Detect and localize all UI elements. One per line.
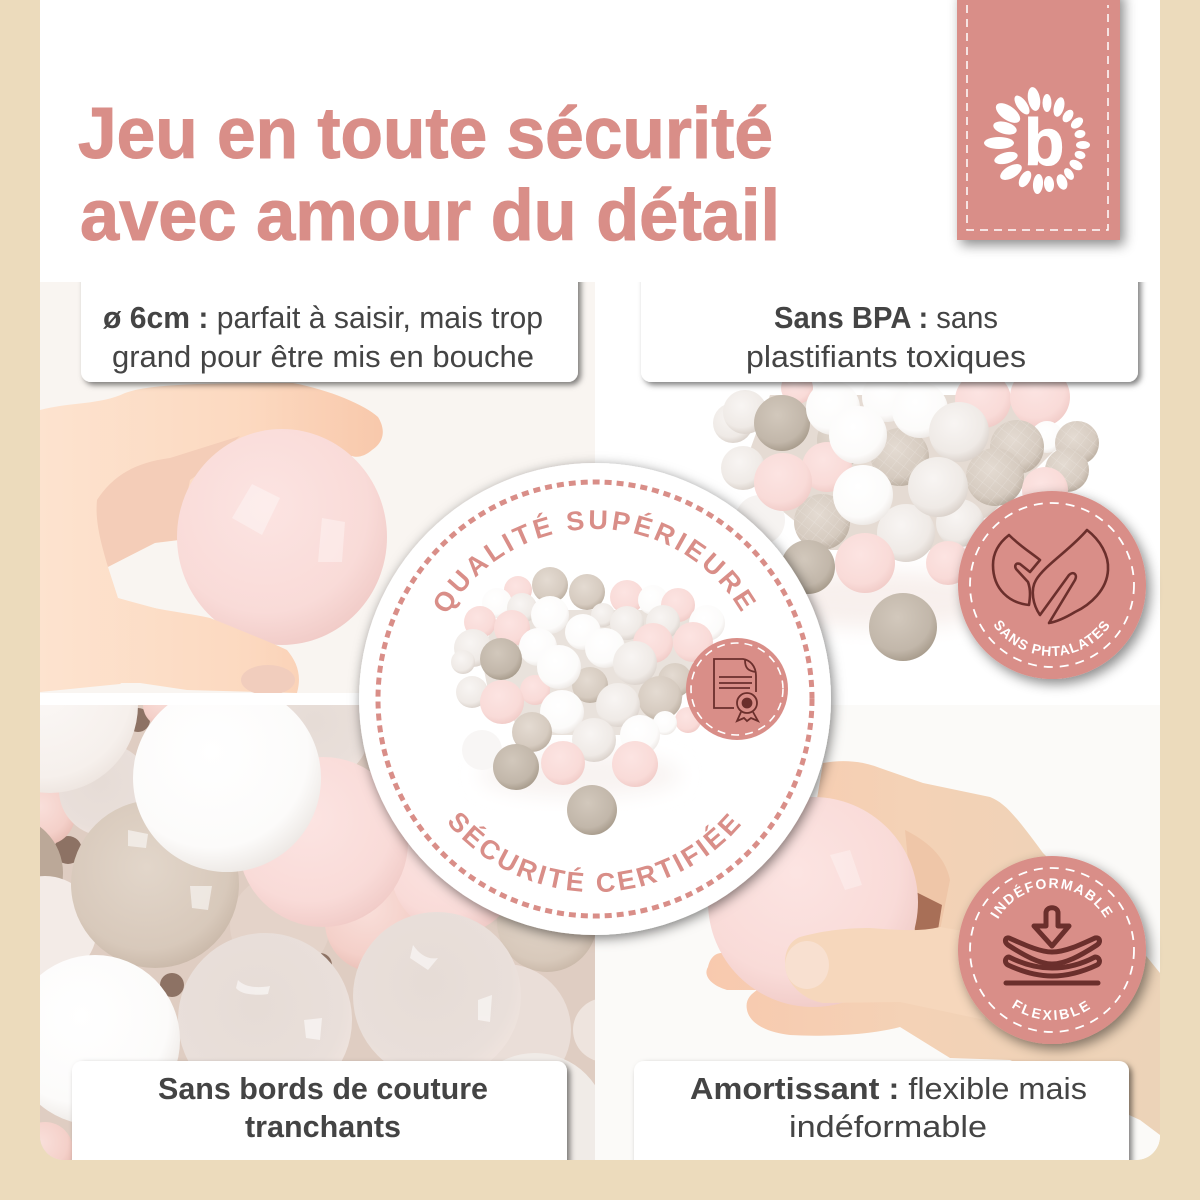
label: no sharp seams	[71, 1060, 574, 1160]
label: diameter	[81, 262, 578, 382]
panel: ball held between fingers photo	[40, 282, 595, 695]
panel: close-up of balls photo	[40, 705, 595, 1160]
curved text: sans phtalates: SANS PHTALATES	[994, 620, 1109, 656]
label: no sharp seams: Sans bords de couture	[158, 1071, 488, 1106]
icon: leaves	[993, 530, 1108, 623]
panel: hand squeezing ball photo	[706, 761, 1160, 1160]
curved text: flexible: FLEXIBLE	[1012, 999, 1090, 1020]
curved text: top: QUALITÉ SUPÉRIEURE	[434, 510, 756, 612]
pink ball squeezed	[708, 797, 918, 1007]
icon: flower logo: b	[1024, 105, 1064, 179]
brand ribbon with logo	[957, 0, 1120, 240]
ball outside the net	[869, 593, 937, 661]
icon: compressed layers with arrow	[1005, 908, 1099, 983]
title	[78, 94, 780, 256]
thumb	[122, 608, 299, 693]
label: diameter: grand pour être mis en bouche	[112, 339, 534, 374]
ball highlights	[128, 830, 492, 1040]
label: no sharp seams: tranchants	[245, 1109, 401, 1144]
labels group	[72, 262, 1138, 1186]
label: diameter: ø 6cm : parfait à saisir, mais trop	[103, 300, 543, 335]
soft shadow under pile	[480, 753, 680, 797]
central quality seal	[352, 457, 842, 947]
icon: flower logo	[984, 86, 1090, 194]
panel: net of balls photo	[713, 367, 1099, 661]
soft shadow under balls	[806, 572, 964, 628]
icon: document with seal	[714, 659, 758, 721]
gap between fingers	[108, 540, 215, 622]
title: avec amour du détail	[80, 176, 780, 256]
thumbnail	[785, 941, 829, 989]
inner palm and fingers	[97, 436, 240, 567]
palm shadow	[905, 830, 950, 930]
curved text: bottom: SÉCURITÉ CERTIFIÉE	[449, 812, 741, 892]
badge: phthalate free	[954, 488, 1158, 692]
label: BPA free: Sans BPA : sans	[774, 300, 998, 335]
dark gap behind ball	[914, 892, 942, 930]
hand silhouette	[40, 383, 383, 692]
pile of balls	[451, 567, 725, 835]
balls inside the net	[713, 367, 1099, 594]
thumbnail	[241, 665, 295, 695]
thumb over ball	[785, 927, 940, 1003]
hand silhouette	[706, 761, 1160, 1135]
badge: flexible	[954, 852, 1158, 1057]
label: BPA free: plastifiants toxiques	[746, 339, 1026, 374]
badge: certificate	[686, 638, 788, 740]
label: shock absorbing: Amortissant : flexible mais	[690, 1071, 1087, 1106]
pink ball in hand	[177, 429, 387, 645]
label: shock absorbing: indéformable	[789, 1109, 987, 1144]
title: Jeu en toute sécurité	[78, 94, 773, 174]
label: shock absorbing	[633, 1060, 1136, 1160]
curved text: indeformable: INDÉFORMABLE	[990, 878, 1113, 919]
label: BPA free	[641, 262, 1138, 382]
dark gaps between balls	[54, 708, 332, 997]
